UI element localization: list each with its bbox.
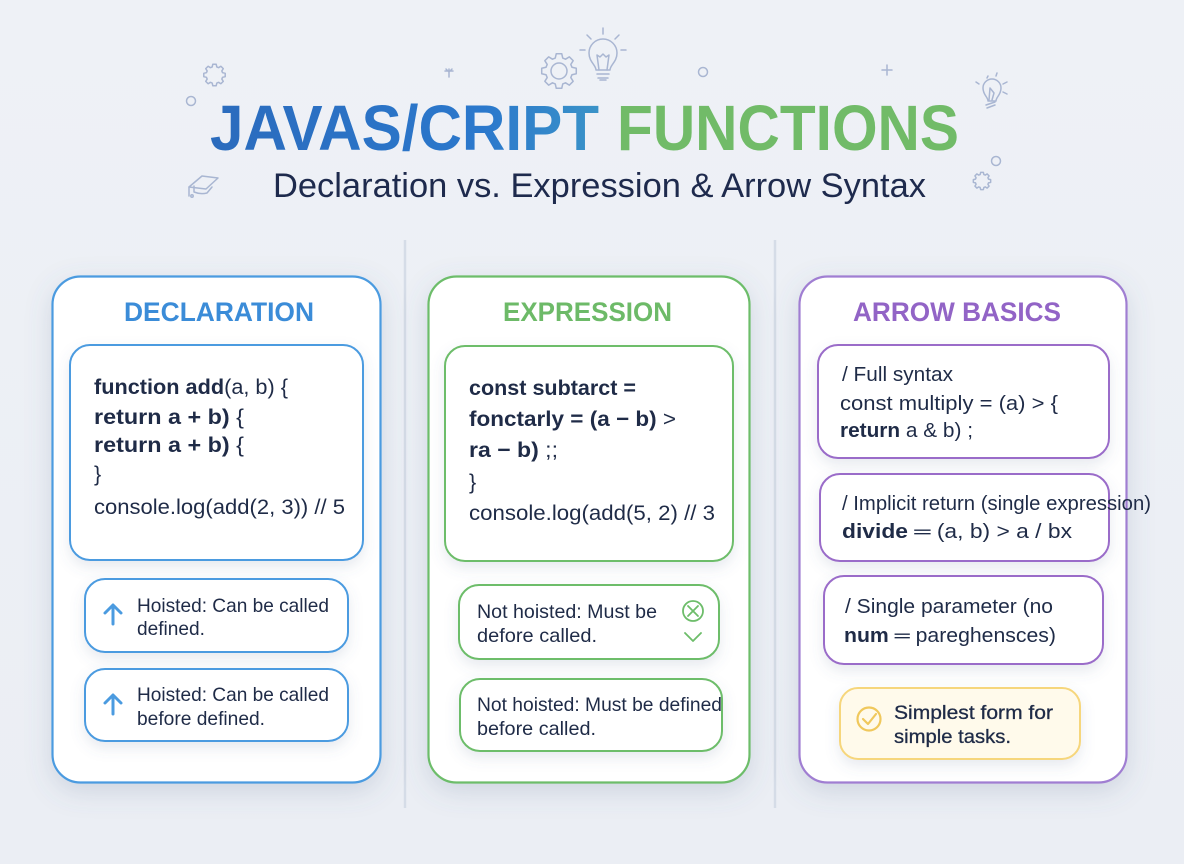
callout: not hoisted 2 <box>460 679 722 751</box>
callout: hoisted 1 <box>85 579 348 652</box>
callout: not hoisted 1 <box>459 585 719 659</box>
code block: declaration <box>70 345 363 560</box>
title: FUNCTIONS <box>617 92 959 164</box>
icon: up arrow <box>105 605 121 624</box>
code block: full syntax: const multiply = (a) > { <box>840 393 1058 415</box>
code block: expression: console.log(add(5, 2) // 3 <box>469 501 715 525</box>
column dividers <box>405 240 775 808</box>
icon: light bulb small <box>976 73 1007 108</box>
code block: expression: ra − b) ;; <box>469 438 558 462</box>
code block: declaration: return a + b) { <box>94 433 244 457</box>
panel: declaration <box>52 276 380 782</box>
icon: sparkle left <box>445 69 453 77</box>
code block: expression: } <box>469 470 476 494</box>
heading: arrow basics: ARROW BASICS <box>853 297 1061 327</box>
code block: declaration: } <box>94 462 101 486</box>
icon: large gear <box>542 54 576 88</box>
icon: graduation cap <box>189 176 218 197</box>
callout: not hoisted 1: Not hoisted: Must be <box>477 601 657 623</box>
code block: implicit return: / Implicit return (single expression) <box>842 493 1151 515</box>
code block: declaration: function add(a, b) { <box>94 375 288 399</box>
icon: small circle left <box>186 96 196 106</box>
icon: chevron <box>685 633 701 641</box>
code block: implicit return: divide ═ (a, b) > a / bx <box>842 521 1072 543</box>
callout: hoisted 2: Hoisted: Can be called <box>137 684 329 706</box>
icon: gear outline right <box>973 172 991 190</box>
callout: not hoisted 2: before called. <box>477 718 596 740</box>
callout: hoisted 1: defined. <box>137 618 205 640</box>
code block: single parameter: / Single parameter (no <box>845 596 1053 618</box>
code block: declaration: return a + b) { <box>94 405 244 429</box>
callout: simplest form: Simplest form for <box>894 702 1054 724</box>
code block: declaration: console.log(add(2, 3)) // 5 <box>94 495 345 519</box>
code block: expression <box>445 346 733 561</box>
icon: up arrow <box>105 695 121 714</box>
heading: declaration: DECLARATION <box>124 297 314 327</box>
code block: full syntax: / Full syntax <box>842 364 953 386</box>
code block: implicit return <box>820 474 1151 561</box>
title <box>210 92 959 164</box>
panel: arrow basics <box>800 276 1151 782</box>
icon: gear outline left <box>204 64 225 86</box>
icon: light bulb large <box>580 28 626 80</box>
callout: hoisted 2: before defined. <box>137 708 265 730</box>
callout: not hoisted 1: defore called. <box>477 625 597 647</box>
icon: small circle top <box>698 68 708 76</box>
code block: single parameter <box>824 576 1103 664</box>
code block: full syntax: return a & b) ; <box>840 420 973 442</box>
icon: check circle <box>858 708 880 730</box>
icon: plus sparkle right <box>882 65 892 75</box>
heading: expression: EXPRESSION <box>503 297 672 327</box>
icon: cross circle <box>683 601 703 621</box>
callout: simplest form: simple tasks. <box>894 726 1011 748</box>
callout: hoisted 1: Hoisted: Can be called <box>137 595 329 617</box>
title: JAVAS/CRIPT <box>210 92 599 164</box>
callout: not hoisted 2: Not hoisted: Must be defined <box>477 694 722 716</box>
code block: single parameter: num ═ pareghensces) <box>844 625 1056 647</box>
callout: hoisted 2 <box>85 669 348 741</box>
callout: simplest form <box>840 688 1080 759</box>
code block: full syntax <box>818 345 1109 458</box>
subtitle: Declaration vs. Expression & Arrow Syntax <box>273 167 926 205</box>
code block: expression: fonctarly = (a − b) > <box>469 407 676 431</box>
panel: expression <box>428 276 750 782</box>
code block: expression: const subtarct = <box>469 376 636 400</box>
icon: small circle right <box>992 156 1000 166</box>
